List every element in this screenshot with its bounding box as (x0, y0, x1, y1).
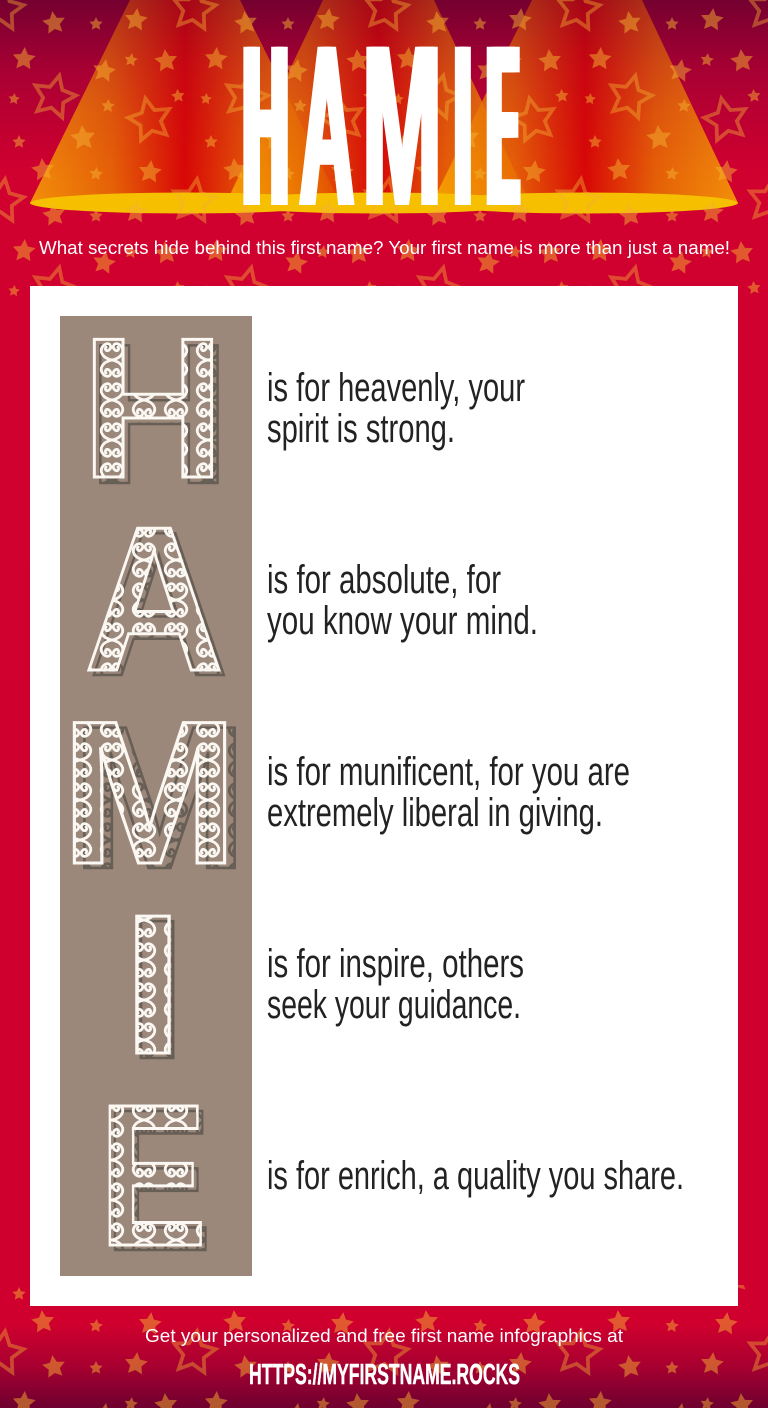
line: A: is for absolute, for (267, 558, 501, 602)
ornamental letter H: H (81, 297, 225, 520)
spotlight floor pools (30, 192, 738, 214)
ornamental letter A: A (84, 484, 224, 714)
spotlight left (30, 0, 340, 203)
star pattern bottom (0, 1285, 768, 1408)
line: I: seek your guidance. (267, 983, 521, 1027)
subtitle: What secrets hide behind this first name? Your first name is more than just a name! (39, 238, 730, 258)
ornamental letter I: I (122, 874, 184, 1096)
spotlights (30, 0, 738, 203)
line: I (267, 942, 524, 1027)
ornamental letter I: I (126, 879, 188, 1101)
ornamental letter A: A (89, 489, 229, 719)
line: H: is for heavenly, your (267, 366, 525, 410)
title: M (362, 0, 442, 254)
title: H (242, 0, 288, 254)
line: M: extremely liberal in giving. (267, 791, 603, 835)
pool right (432, 192, 738, 214)
spotlight right (432, 0, 738, 203)
letter descriptions (267, 366, 684, 1198)
ornamental letter M: M (70, 684, 249, 912)
footer url: HTTPS://MYFIRSTNAME.ROCKS (249, 1359, 520, 1391)
line: I: is for inspire, others (267, 942, 524, 986)
line: H (267, 366, 525, 451)
footer prompt: Get your personalized and free first name infographics at (145, 1326, 623, 1346)
spotlight middle (226, 0, 530, 203)
star pattern top (0, 0, 768, 298)
taupe letter column (60, 316, 252, 1276)
line: M: is for munificent, for you are (267, 750, 630, 794)
line: A: you know your mind. (267, 599, 538, 643)
title (242, 0, 521, 254)
line: M (267, 750, 630, 835)
title: A (300, 0, 354, 254)
pool middle (226, 192, 530, 214)
line: A (267, 558, 538, 643)
ornamental letter E: E (104, 1067, 212, 1293)
title: I (452, 0, 474, 254)
line: H: spirit is strong. (267, 407, 455, 451)
ornamental letter E: E (99, 1062, 207, 1288)
ornamental letter H: H (87, 303, 231, 526)
title: E (488, 0, 518, 254)
pool left (30, 192, 340, 214)
white content panel (30, 286, 738, 1306)
ornamental letter M: M (60, 679, 239, 907)
